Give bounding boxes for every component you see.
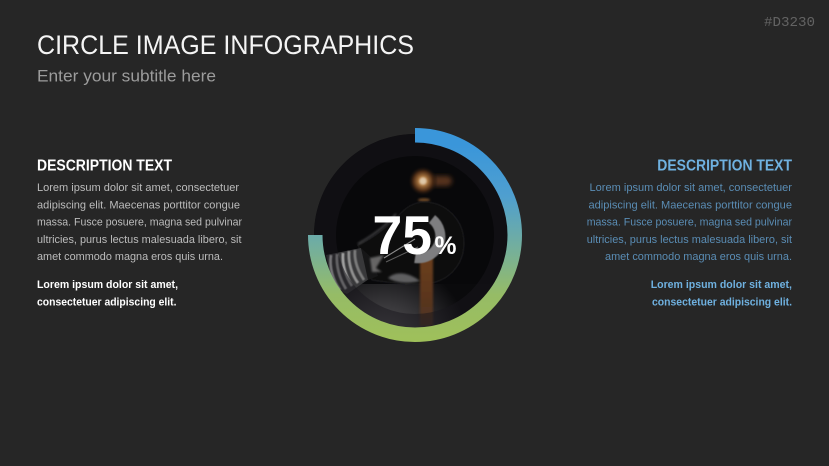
glass globe [358,202,464,284]
title: CIRCLE IMAGE INFOGRAPHICS [37,30,414,60]
panel: left description [37,158,242,308]
left body text: ultricies, purus lectus malesuada libero, sit [37,234,242,246]
right body text: massa. Fusce posuere, magna sed pulvinar [587,217,792,229]
left body text: Lorem ipsum dolor sit amet, consectetuer [37,182,239,194]
left body text: adipiscing elit. Maecenas porttitor congue [37,199,240,211]
left bold text: consectetuer adipiscing elit. [37,296,176,308]
outer tinted band [314,134,516,336]
right body text: amet commodo magna eros quis urna. [605,251,792,263]
right bold text [651,279,792,308]
bulb lower highlight [388,273,420,283]
left body text: massa. Fusce posuere, magna sed pulvinar [37,217,242,229]
right heading: DESCRIPTION TEXT [657,158,792,174]
percentage value: % [434,232,456,260]
right bold text: consectetuer adipiscing elit. [652,296,792,308]
bulb tip [418,198,430,202]
percentage value: 75 [372,204,432,266]
floor [343,284,452,328]
right body text [587,182,792,263]
bulb neck and filament [361,239,418,280]
left body text: amet commodo magna eros quis urna. [37,251,223,263]
white reflection in globe [415,219,440,258]
circle image: light bulb photo [314,134,508,327]
left heading: DESCRIPTION TEXT [37,158,172,174]
right bold text: Lorem ipsum dolor sit amet, [651,279,792,291]
glow above bulb [410,168,454,194]
product code: #D3230 [764,16,815,31]
left body text [37,182,242,263]
right body text: ultricies, purus lectus malesuada libero, sit [587,234,792,246]
orange reflection [420,254,433,326]
progress ring 75% [315,135,515,335]
subtitle: Enter your subtitle here [37,66,216,86]
right body text: adipiscing elit. Maecenas porttitor congue [588,199,792,211]
left bold text: Lorem ipsum dolor sit amet, [37,279,178,291]
panel: right description [587,158,792,308]
screw base [326,248,369,294]
right body text: Lorem ipsum dolor sit amet, consectetuer [590,182,792,194]
left bold text [37,279,178,308]
